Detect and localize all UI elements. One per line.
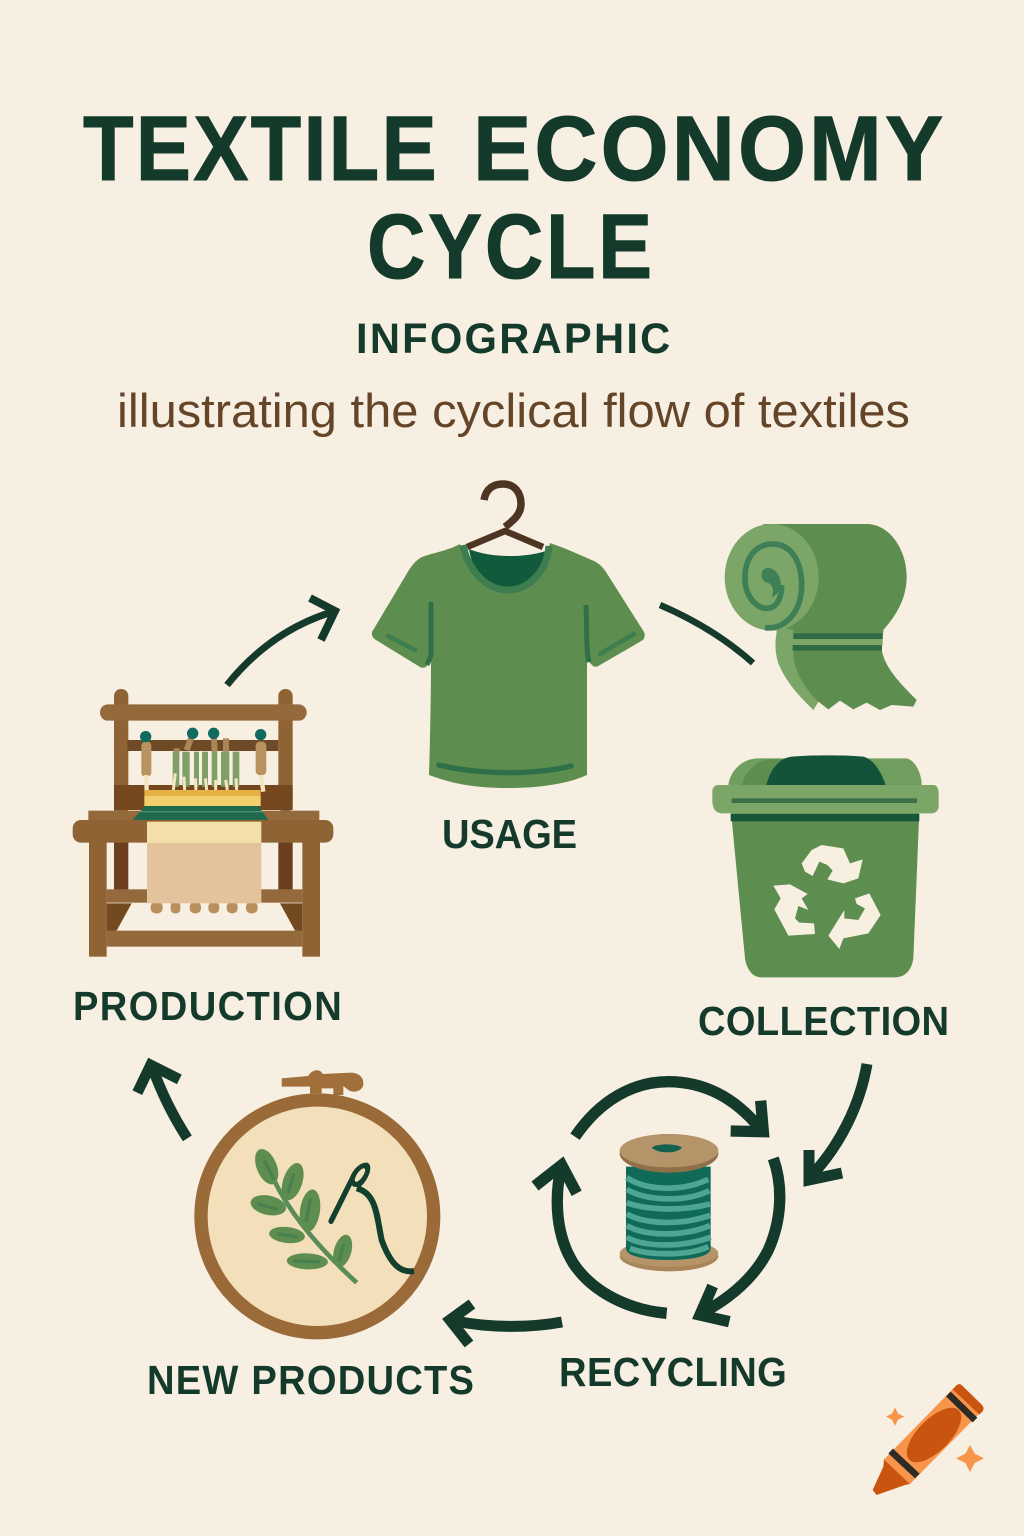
- arrow: production to usage: [227, 598, 335, 685]
- label: new products: NEW PRODUCTS: [147, 1358, 474, 1403]
- icon: loom (production): [73, 689, 333, 957]
- needle and thread: [331, 1163, 414, 1271]
- arrow: recycling to new products: [450, 1304, 562, 1344]
- label: recycling: RECYCLING: [559, 1350, 787, 1395]
- title: TEXTILE: [83, 97, 437, 200]
- label: collection: COLLECTION: [698, 999, 949, 1044]
- icon: recycling symbol: [773, 845, 881, 949]
- arrow: collection to recycling: [809, 1064, 867, 1180]
- icon: fabric roll: [725, 524, 917, 710]
- title: CYCLE: [367, 196, 652, 298]
- subtitle: INFOGRAPHIC: [356, 314, 670, 362]
- arrow: new products to production: [137, 1065, 187, 1138]
- title: [83, 97, 943, 298]
- label: usage: USAGE: [442, 812, 577, 857]
- tagline: illustrating the cyclical flow of textiles: [117, 384, 910, 437]
- icon: thread spool with circular arrows (recycling): [535, 1082, 780, 1322]
- label: production: PRODUCTION: [73, 984, 342, 1029]
- icon: t-shirt on hanger (usage): [372, 484, 645, 788]
- arrow: usage to collection: [660, 605, 753, 663]
- spool: [620, 1134, 718, 1271]
- icon: recycling bin: [712, 755, 939, 977]
- title: ECONOMY: [473, 98, 943, 201]
- icon: embroidery hoop (new products): [201, 1070, 434, 1333]
- icon: crayon logo: [873, 1384, 984, 1495]
- circular arrows: [535, 1082, 780, 1322]
- leaves: [249, 1146, 357, 1283]
